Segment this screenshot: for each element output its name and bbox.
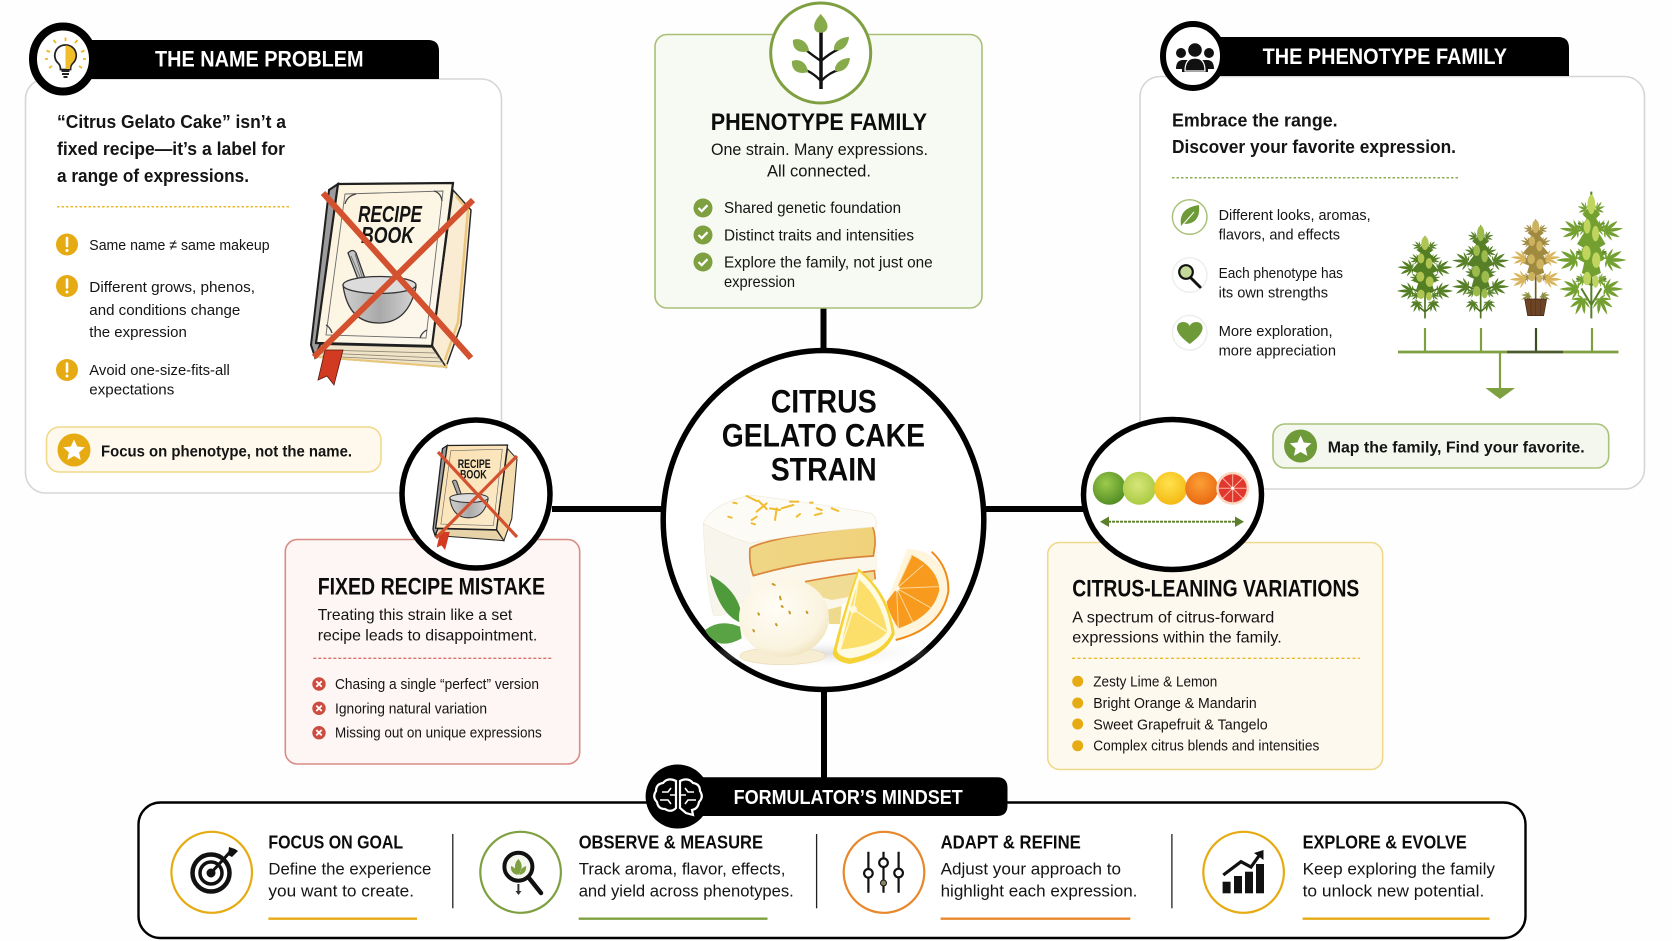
header badge <box>646 764 1008 828</box>
bullet: more exploration: more appreciation <box>1219 342 1336 360</box>
intro text: One strain. Many expressions. <box>711 140 928 159</box>
panel: citrus-leaning variations <box>1048 420 1383 770</box>
icon: branching plant <box>771 3 871 103</box>
card background <box>1140 76 1644 489</box>
hub title: GELATO CAKE <box>722 418 925 454</box>
bullet: different looks: Different looks, aromas, <box>1219 207 1371 224</box>
icon: small crossed book in circle: RECIPE <box>458 457 491 471</box>
intro text: All connected. <box>767 162 871 180</box>
heading: CITRUS-LEANING VARIATIONS <box>1072 576 1359 603</box>
illustration: four cannabis phenotypes <box>1397 192 1627 319</box>
header bar <box>60 40 439 79</box>
bullet: more exploration: More exploration, <box>1219 323 1333 340</box>
hub title: STRAIN <box>771 452 877 488</box>
item: explore and evolve: EXPLORE & EVOLVE <box>1303 831 1467 852</box>
lower sponge <box>805 571 875 600</box>
panel: formulator's mindset <box>138 764 1526 938</box>
item: explore and evolve: Keep exploring the family <box>1303 859 1495 878</box>
item: adapt and refine: ADAPT & REFINE <box>941 831 1081 852</box>
x item 2: Ignoring natural variation <box>335 700 487 717</box>
bullet: different grows: Different grows, phenos, <box>89 279 255 296</box>
dot item 4: Complex citrus blends and intensities <box>1093 738 1319 755</box>
bullet: same name: Same name ≠ same makeup <box>89 237 270 254</box>
panel: the name problem <box>26 26 502 493</box>
card background <box>285 540 580 764</box>
bullet: each phenotype: its own strengths <box>1219 284 1328 302</box>
card background <box>655 34 982 308</box>
bullet: different grows: and conditions change <box>89 302 240 319</box>
lead text: fixed recipe—it’s a label for <box>57 138 285 159</box>
bullet: same name <box>56 234 270 256</box>
intro text: recipe leads to disappointment. <box>318 627 537 644</box>
intro text <box>1072 609 1282 647</box>
icon: citrus spectrum in circle <box>1084 420 1262 570</box>
bullet: different looks <box>1172 200 1371 244</box>
header bar <box>1190 37 1569 76</box>
dot item 3: Sweet Grapefruit & Tangelo <box>1093 716 1268 733</box>
lead text: “Citrus Gelato Cake” isn’t a <box>57 111 287 132</box>
lead text: Embrace the range. <box>1172 110 1338 130</box>
item: focus on goal: FOCUS ON GOAL <box>268 831 403 852</box>
callout: map the family: Map the family, Find your favorite. <box>1328 440 1585 456</box>
lead text: Discover your favorite expression. <box>1172 136 1456 157</box>
panel: fixed recipe mistake <box>285 420 580 764</box>
lemon zest <box>728 496 838 524</box>
icon: target <box>192 847 238 892</box>
callout: focus on phenotype <box>46 427 381 472</box>
lead text: a range of expressions. <box>57 165 249 186</box>
illustration: crossed-out recipe book: BOOK <box>361 222 415 248</box>
intro text: expressions within the family. <box>1072 630 1282 647</box>
illustration: crossed-out recipe book <box>311 183 473 385</box>
check item 2: Distinct traits and intensities <box>724 228 914 244</box>
item: observe and measure: and yield across phenotypes. <box>579 882 794 901</box>
panel: the phenotype family (right) <box>1140 24 1644 489</box>
icon: small crossed book in circle <box>402 420 550 568</box>
item: adapt and refine: highlight each expression. <box>941 882 1137 901</box>
bullet: avoid one size <box>56 359 230 398</box>
callout: focus on phenotype: Focus on phenotype, not the name. <box>101 444 352 460</box>
icon: people <box>1163 24 1223 88</box>
header bar: THE PHENOTYPE FAMILY <box>1263 44 1507 69</box>
item: adapt and refine <box>844 831 1137 919</box>
header bar: THE NAME PROBLEM <box>155 46 364 72</box>
intro text <box>318 607 537 644</box>
bullet: avoid one size: Avoid one-size-fits-all <box>89 362 230 379</box>
bullet: avoid one size: expectations <box>89 382 174 398</box>
bullet: different grows: the expression <box>89 324 187 341</box>
lead text <box>57 111 287 186</box>
panel: phenotype family (top centre) <box>655 3 982 308</box>
frosting top <box>703 495 876 543</box>
item: focus on goal <box>171 831 431 919</box>
intro text: Treating this strain like a set <box>318 607 513 624</box>
item: adapt and refine: Adjust your approach to <box>941 859 1121 878</box>
orange slice <box>887 548 948 641</box>
hub title: CITRUS <box>771 384 877 420</box>
header badge: FORMULATOR’S MINDSET <box>734 787 963 809</box>
callout: map the family <box>1273 424 1609 468</box>
cake left side <box>703 523 750 616</box>
illustration: crossed-out recipe book: RECIPE <box>358 201 422 227</box>
check item 3: expression <box>724 274 795 291</box>
item: observe and measure: Track aroma, flavor, effects, <box>579 859 785 878</box>
bullet: different looks: flavors, and effects <box>1219 226 1340 244</box>
item: explore and evolve <box>1203 831 1495 919</box>
check item 3 <box>694 252 933 291</box>
heading: PHENOTYPE FAMILY <box>711 109 927 136</box>
item: observe and measure <box>480 831 794 919</box>
tree connector with down arrow <box>1398 328 1618 399</box>
item: observe and measure: OBSERVE & MEASURE <box>579 831 763 852</box>
dot item 1: Zesty Lime & Lemon <box>1093 674 1217 691</box>
x item 3: Missing out on unique expressions <box>335 725 542 742</box>
check item 3: Explore the family, not just one <box>724 254 933 272</box>
dot item 2: Bright Orange & Mandarin <box>1093 695 1257 712</box>
item: explore and evolve: to unlock new potential. <box>1303 882 1484 901</box>
outer box <box>138 802 1526 938</box>
bullet: each phenotype <box>1172 258 1343 302</box>
central hub: citrus gelato cake strain <box>663 350 984 690</box>
leaves <box>710 575 743 623</box>
check item 1: Shared genetic foundation <box>724 200 901 217</box>
card background <box>1048 542 1383 770</box>
bullet: each phenotype: Each phenotype has <box>1219 265 1343 282</box>
icon: light bulb <box>33 26 93 92</box>
illustration: cake slice, gelato and citrus <box>703 495 948 668</box>
icon: small crossed book in circle: BOOK <box>460 468 487 482</box>
bullet: different grows <box>56 275 255 341</box>
bullet: more exploration <box>1172 315 1336 360</box>
intro text: A spectrum of citrus-forward <box>1072 609 1274 626</box>
card background <box>26 79 502 493</box>
icon: growth chart <box>1223 850 1264 893</box>
hub title <box>722 384 925 488</box>
connector lines <box>552 308 1086 780</box>
lemon wedge <box>833 568 895 664</box>
heading: FIXED RECIPE MISTAKE <box>318 573 545 600</box>
item: focus on goal: Define the experience <box>268 859 431 878</box>
icon: sliders <box>864 852 903 893</box>
lead text <box>1172 110 1456 157</box>
gelato <box>740 647 825 665</box>
item: focus on goal: you want to create. <box>268 882 414 901</box>
icon: magnifier with leaf <box>504 853 541 895</box>
cake front <box>748 525 877 624</box>
x item 1: Chasing a single “perfect” version <box>335 676 539 693</box>
upper sponge <box>750 525 875 576</box>
intro text <box>711 140 928 180</box>
